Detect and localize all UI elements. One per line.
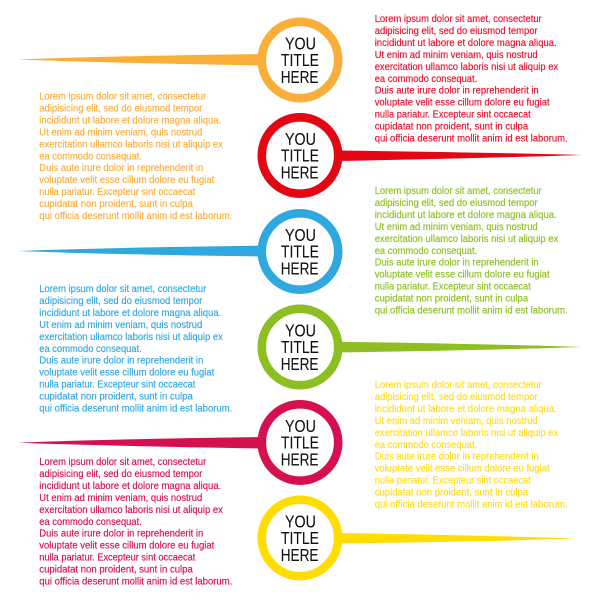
text block: red: incididunt ut labore et dolore magna aliqua. bbox=[375, 38, 557, 49]
text block: green: cupidatat non proident, sunt in culpa bbox=[375, 294, 528, 305]
title: red circle bbox=[281, 129, 319, 182]
text block: yellow: exercitation ullamco laboris nisi ut aliquip ex bbox=[375, 428, 559, 439]
text block: green: incididunt ut labore et dolore magna aliqua. bbox=[375, 210, 557, 221]
title: green circle: TITLE bbox=[281, 337, 319, 357]
text block: blue: cupidatat non proident, sunt in culpa bbox=[39, 392, 193, 403]
title: yellow circle: YOU bbox=[285, 511, 316, 531]
text block: orange: exercitation ullamco laboris nisi ut aliquip ex bbox=[39, 139, 224, 150]
text block: green: adipisicing elit, sed do eiusmod tempor bbox=[375, 198, 538, 209]
text block: yellow: adipisicing elit, sed do eiusmod tempor bbox=[375, 392, 538, 403]
text block: green: Lorem ipsum dolor sit amet, consectetur bbox=[375, 186, 542, 197]
title: yellow circle: HERE bbox=[281, 545, 318, 565]
text block: orange: nulla pariatur. Excepteur sint occaecat bbox=[39, 187, 195, 198]
text block: blue: nulla pariatur. Excepteur sint occaecat bbox=[39, 380, 195, 391]
text block: red: adipisicing elit, sed do eiusmod tempor bbox=[375, 26, 538, 37]
ring: yellow circle bbox=[262, 500, 338, 576]
title: green circle bbox=[281, 320, 319, 374]
title: green circle: HERE bbox=[281, 354, 318, 374]
text block: yellow: voluptate velit esse cillum dolore eu fugiat bbox=[375, 464, 550, 475]
pointer: red spike bbox=[338, 150, 583, 161]
panel: red item bbox=[262, 14, 583, 194]
title: blue circle: TITLE bbox=[281, 242, 319, 262]
title: red circle: HERE bbox=[281, 162, 318, 182]
text block: yellow: Lorem ipsum dolor sit amet, consectetur bbox=[375, 380, 542, 391]
title: orange circle: YOU bbox=[285, 33, 316, 53]
text block: orange: ea commodo consequat. bbox=[39, 151, 142, 162]
text block: green: voluptate velit esse cillum dolore eu fugiat bbox=[375, 270, 550, 281]
text block: yellow: qui officia deserunt mollit anim id est laborum. bbox=[375, 500, 568, 510]
text block: magenta: Lorem ipsum dolor sit amet, consectetur bbox=[39, 457, 207, 468]
title: orange circle: HERE bbox=[281, 67, 318, 87]
text block: red: nulla pariatur. Excepteur sint occaecat bbox=[375, 110, 531, 121]
text block: orange: incididunt ut labore et dolore magna aliqua. bbox=[39, 115, 221, 126]
panel: yellow item bbox=[262, 380, 576, 576]
text block: green: exercitation ullamco laboris nisi ut aliquip ex bbox=[375, 234, 559, 245]
text block: red: cupidatat non proident, sunt in culpa bbox=[375, 122, 528, 133]
title: magenta circle: HERE bbox=[281, 449, 318, 469]
text block: orange: adipisicing elit, sed do eiusmod tempor bbox=[39, 103, 203, 114]
text block: magenta: exercitation ullamco laboris nisi ut aliquip ex bbox=[39, 505, 224, 516]
text block: magenta bbox=[39, 457, 232, 588]
text block: red bbox=[375, 14, 568, 144]
text block: magenta: ea commodo consequat. bbox=[39, 517, 142, 528]
text block: orange bbox=[39, 92, 232, 222]
text block: magenta: cupidatat non proident, sunt in culpa bbox=[39, 565, 193, 576]
text block: orange: Lorem ipsum dolor sit amet, consectetur bbox=[39, 92, 207, 102]
text block: blue: incididunt ut labore et dolore magna aliqua. bbox=[39, 308, 221, 319]
text block: red: Duis aute irure dolor in reprehenderit in bbox=[375, 86, 539, 97]
text block: blue: voluptate velit esse cillum dolore eu fugiat bbox=[39, 368, 214, 379]
title: green circle: YOU bbox=[285, 320, 316, 340]
pointer: green spike bbox=[338, 342, 582, 352]
text block: yellow: Duis aute irure dolor in reprehenderit in bbox=[375, 452, 539, 463]
panel: blue item bbox=[18, 213, 338, 414]
pointer: yellow spike bbox=[338, 533, 576, 544]
text block: orange: cupidatat non proident, sunt in culpa bbox=[39, 199, 193, 210]
text block: yellow: incididunt ut labore et dolore magna aliqua. bbox=[375, 404, 557, 415]
text block: yellow: Ut enim ad minim veniam, quis nostrud bbox=[375, 416, 538, 427]
text block: magenta: adipisicing elit, sed do eiusmod tempor bbox=[39, 469, 203, 480]
text block: yellow: cupidatat non proident, sunt in culpa bbox=[375, 488, 528, 499]
text block: blue: Duis aute irure dolor in reprehenderit in bbox=[39, 356, 204, 367]
panel: orange item bbox=[18, 22, 338, 222]
text block: orange: Duis aute irure dolor in reprehenderit in bbox=[39, 163, 204, 174]
ring: red circle bbox=[262, 117, 338, 194]
text block: red: ea commodo consequat. bbox=[375, 74, 477, 85]
text block: green: Duis aute irure dolor in reprehenderit in bbox=[375, 258, 539, 269]
text block: magenta: incididunt ut labore et dolore magna aliqua. bbox=[39, 481, 221, 492]
text block: blue: exercitation ullamco laboris nisi ut aliquip ex bbox=[39, 332, 224, 343]
ring: green circle bbox=[262, 309, 338, 385]
title: yellow circle: TITLE bbox=[281, 528, 319, 548]
text block: green: nulla pariatur. Excepteur sint occaecat bbox=[375, 282, 531, 293]
title: magenta circle: TITLE bbox=[281, 432, 319, 452]
text block: magenta: Ut enim ad minim veniam, quis nostrud bbox=[39, 493, 202, 504]
text block: magenta: voluptate velit esse cillum dolore eu fugiat bbox=[39, 541, 214, 552]
text block: orange: qui officia deserunt mollit anim id est laborum. bbox=[39, 211, 232, 222]
ring: orange circle bbox=[262, 22, 338, 98]
title: blue circle bbox=[281, 225, 319, 278]
panel: green item bbox=[262, 186, 582, 385]
ring: blue circle bbox=[262, 213, 338, 290]
title: magenta circle bbox=[281, 416, 319, 469]
text block: yellow: nulla pariatur. Excepteur sint occaecat bbox=[375, 476, 531, 487]
title: blue circle: YOU bbox=[285, 225, 316, 245]
text block: red: Lorem ipsum dolor sit amet, consectetur bbox=[375, 14, 542, 25]
text block: red: Ut enim ad minim veniam, quis nostrud bbox=[375, 50, 538, 61]
text block: blue: ea commodo consequat. bbox=[39, 344, 142, 355]
text block: blue bbox=[39, 284, 232, 414]
title: magenta circle: YOU bbox=[285, 416, 316, 436]
text block: blue: adipisicing elit, sed do eiusmod tempor bbox=[39, 296, 203, 307]
text block: red: qui officia deserunt mollit anim id est laborum. bbox=[375, 134, 568, 144]
ring: magenta circle bbox=[262, 404, 338, 481]
text block: red: exercitation ullamco laboris nisi ut aliquip ex bbox=[375, 62, 559, 73]
panel: magenta item bbox=[18, 404, 338, 588]
text block: orange: Ut enim ad minim veniam, quis nostrud bbox=[39, 127, 202, 138]
text block: blue: Lorem ipsum dolor sit amet, consectetur bbox=[39, 284, 207, 295]
title: orange circle: TITLE bbox=[281, 50, 319, 70]
text block: yellow bbox=[375, 380, 568, 510]
pointer: blue spike bbox=[18, 246, 262, 256]
title: yellow circle bbox=[281, 511, 319, 565]
title: orange circle bbox=[281, 33, 319, 87]
text block: magenta: Duis aute irure dolor in reprehenderit in bbox=[39, 529, 204, 540]
text block: blue: qui officia deserunt mollit anim id est laborum. bbox=[39, 404, 232, 414]
pointer: magenta spike bbox=[18, 437, 262, 448]
text block: green: Ut enim ad minim veniam, quis nostrud bbox=[375, 222, 538, 233]
title: red circle: YOU bbox=[285, 129, 316, 149]
text block: magenta: qui officia deserunt mollit anim id est laborum. bbox=[39, 576, 232, 588]
text block: green: ea commodo consequat. bbox=[375, 246, 477, 257]
text block: magenta: nulla pariatur. Excepteur sint occaecat bbox=[39, 553, 195, 564]
text block: green: qui officia deserunt mollit anim id est laborum. bbox=[375, 306, 568, 316]
text block: green bbox=[375, 186, 568, 316]
text block: yellow: ea commodo consequat. bbox=[375, 440, 477, 451]
text block: orange: voluptate velit esse cillum dolore eu fugiat bbox=[39, 175, 214, 186]
text block: blue: Ut enim ad minim veniam, quis nostrud bbox=[39, 320, 202, 331]
title: red circle: TITLE bbox=[281, 146, 319, 166]
text block: red: voluptate velit esse cillum dolore eu fugiat bbox=[375, 98, 550, 109]
title: blue circle: HERE bbox=[281, 258, 318, 278]
pointer: orange spike bbox=[18, 54, 262, 66]
